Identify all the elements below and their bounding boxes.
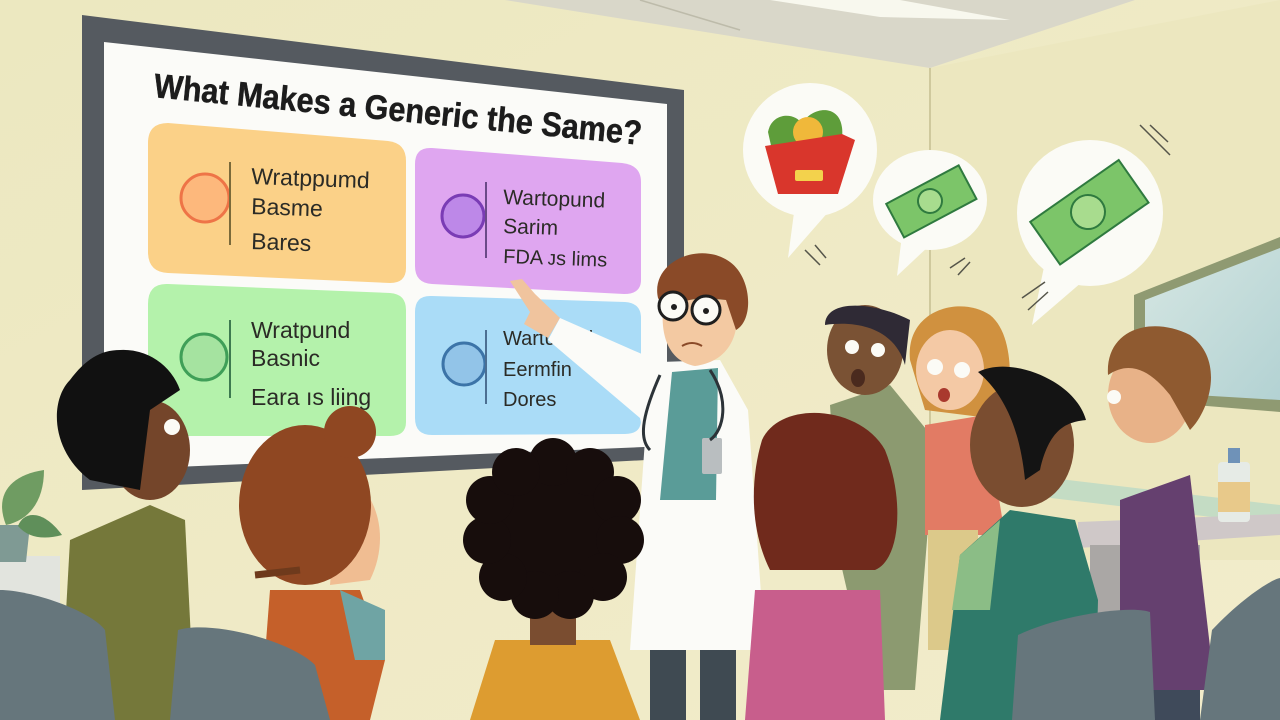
plant <box>0 470 62 626</box>
card: blue: Wartᴜnd ıl <box>503 328 593 350</box>
thought bubble: banknote <box>873 150 987 276</box>
card: purple <box>415 148 641 294</box>
card: green: Eara ıs liing <box>251 384 371 410</box>
card: purple: Sarim <box>503 215 558 240</box>
card: orange: Bares <box>251 228 312 256</box>
doctor <box>510 253 765 720</box>
audience: girl back pink <box>745 413 897 720</box>
chairs <box>0 578 1280 720</box>
card: purple: Wartopund <box>503 186 606 213</box>
card: blue: Eermfin <box>503 359 572 381</box>
card: green: Wratpund <box>251 317 350 343</box>
audience: boy green vest <box>940 367 1098 720</box>
card: green: Basnic <box>251 345 320 371</box>
audience: child with bun <box>239 406 385 720</box>
thought bubble: groceries <box>743 83 877 258</box>
card: blue <box>415 296 641 435</box>
audience: boy right in purple <box>1107 326 1215 720</box>
audience: left child curly <box>57 350 195 720</box>
motion lines <box>805 125 1170 310</box>
audience: afro child back orange <box>463 438 644 720</box>
wall screen <box>82 15 684 490</box>
card: orange: Basme <box>251 193 323 221</box>
card: green <box>148 284 406 436</box>
audience: woman in coral <box>910 306 1010 650</box>
side table with bottle <box>1078 448 1280 665</box>
card: purple: FDA ᴊs lims <box>503 246 608 272</box>
title: What Makes a Generic the Same? <box>152 67 644 153</box>
card: blue: Dores <box>503 389 556 411</box>
card: orange <box>148 123 406 283</box>
audience: back standing man <box>825 305 935 690</box>
thought bubble: flying money <box>1017 140 1163 325</box>
window <box>1134 237 1280 412</box>
card: orange: Wratppumd <box>251 163 370 193</box>
